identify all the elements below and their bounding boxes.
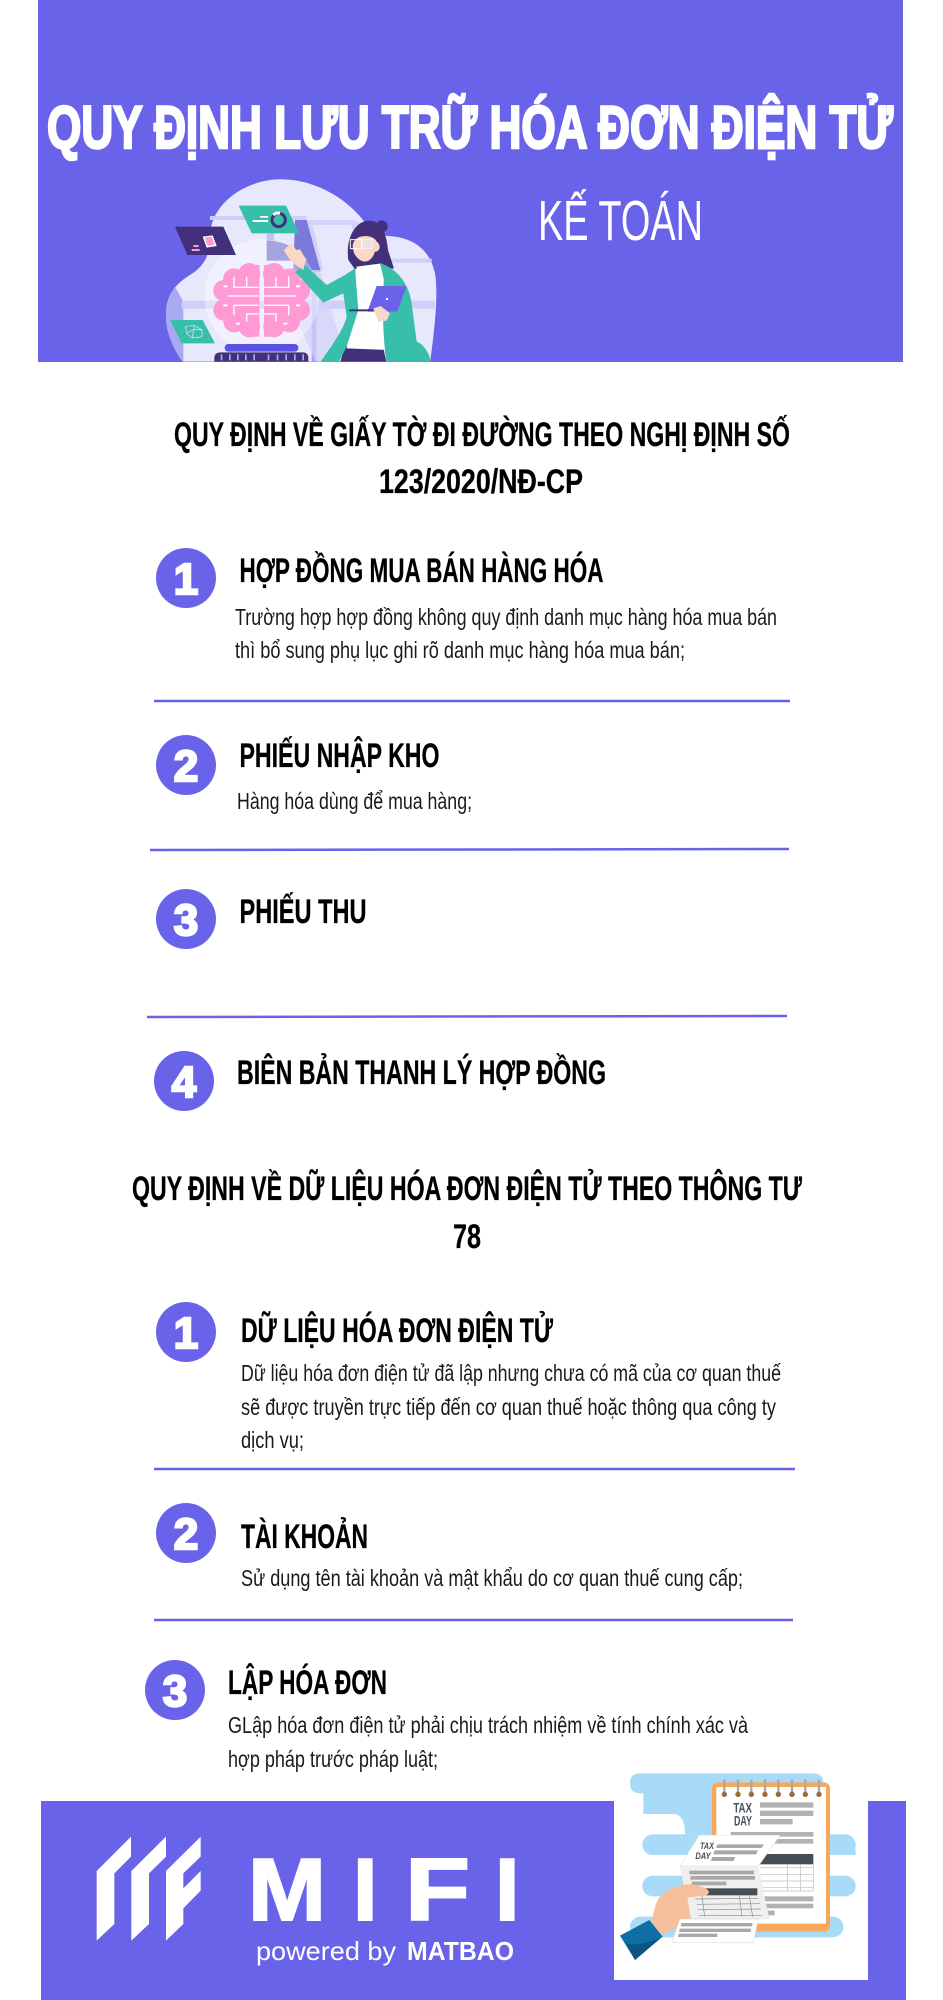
illustration: tax day documents (620, 1773, 856, 1960)
logo: MIFI wordmark: I (353, 1840, 377, 1939)
item 3: lập hóa đơn: GLập hóa đơn điện tử phải chịu trách nhiệm về tính chính xác và (228, 1712, 748, 1738)
receipt (680, 1835, 780, 1919)
panel: cube card (170, 320, 215, 343)
panel: chip card (175, 227, 236, 255)
item 2: phiếu nhập kho: Hàng hóa dùng để mua hàng; (237, 788, 472, 814)
item 4: biên bản (154, 1051, 606, 1111)
item 3: lập hóa đơn: hợp pháp trước pháp luật; (228, 1746, 438, 1772)
item 3: phiếu thu: PHIẾU THU (240, 893, 366, 931)
item 1: hợp đồng: HỢP ĐỒNG MUA BÁN HÀNG HÓA (240, 552, 604, 590)
logo: MIFI wordmark: M (248, 1840, 326, 1939)
item 1: dữ liệu: 1 (174, 1309, 198, 1358)
item 1: dữ liệu: DỮ LIỆU HÓA ĐƠN ĐIỆN TỬ (241, 1312, 554, 1350)
item 1: hợp đồng: Trường hợp hợp đồng không quy định danh mục hàng hóa mua bán (235, 604, 777, 630)
heading: section two (132, 1169, 803, 1256)
item 2: tài khoản: TÀI KHOẢN (241, 1518, 368, 1556)
item 3: phiếu thu (156, 889, 366, 949)
panel: footer (41, 1801, 906, 2000)
item 2: phiếu nhập kho: PHIẾU NHẬP KHO (240, 737, 440, 775)
item 2: tài khoản: 2 (174, 1510, 198, 1559)
logo: MIFI mark (97, 1837, 201, 1941)
item 3: lập hóa đơn: 3 (163, 1667, 187, 1716)
panel: teal chart card (239, 206, 299, 233)
heading: section one: 123/2020/NĐ-CP (379, 463, 583, 501)
hand (620, 1884, 709, 1960)
item 1: dữ liệu (156, 1302, 781, 1453)
heading: section two: 78 (453, 1218, 481, 1256)
heading: section one (174, 415, 790, 501)
icon: woman (284, 220, 431, 363)
logo: powered by: powered by (256, 1936, 396, 1966)
item 3: lập hóa đơn: LẬP HÓA ĐƠN (228, 1664, 387, 1702)
icon: pink brain (213, 263, 310, 337)
receipt: TAX (700, 1841, 715, 1851)
panel: header banner (38, 0, 903, 362)
logo: powered by: MATBAO (407, 1936, 514, 1966)
notebook (712, 1780, 830, 1932)
panel: footer image backdrop (614, 1765, 868, 1980)
item 1: dữ liệu: sẽ được truyền trực tiếp đến cơ quan thuế hoặc thông qua công ty (241, 1394, 776, 1420)
item 2: tài khoản (156, 1503, 743, 1591)
logo: MIFI wordmark (248, 1840, 519, 1939)
item 1: hợp đồng: thì bổ sung phụ lục ghi rõ danh mục hàng hóa mua bán; (235, 637, 685, 663)
item 1: dữ liệu: dịch vụ; (241, 1427, 304, 1453)
item 3: phiếu thu: 3 (174, 896, 198, 945)
item 2: phiếu nhập kho: 2 (174, 742, 198, 791)
logo: MIFI wordmark: I (495, 1840, 519, 1939)
slip (672, 1919, 758, 1942)
notebook: TAX (733, 1800, 752, 1816)
logo: MIFI wordmark: F (405, 1840, 470, 1939)
item 3: lập hóa đơn (145, 1660, 748, 1772)
item 1: hợp đồng: 1 (174, 555, 198, 604)
item 4: biên bản: BIÊN BẢN THANH LÝ HỢP ĐỒNG (237, 1054, 606, 1092)
item 1: hợp đồng (156, 548, 777, 663)
subtitle: KẾ TOÁN (538, 188, 703, 253)
receipt: DAY (695, 1851, 711, 1861)
item 2: tài khoản: Sử dụng tên tài khoản và mật khẩu do cơ quan thuế cung cấp; (241, 1565, 743, 1591)
illustration: woman with brain hologram (166, 179, 436, 363)
icon: hologram base (214, 344, 308, 363)
item 2: phiếu nhập kho (156, 735, 472, 814)
notebook: DAY (734, 1813, 752, 1829)
logo: powered by (256, 1936, 514, 1966)
item 4: biên bản: 4 (172, 1058, 197, 1107)
item 1: dữ liệu: Dữ liệu hóa đơn điện tử đã lập nhưng chưa có mã của cơ quan thuế (241, 1360, 781, 1386)
